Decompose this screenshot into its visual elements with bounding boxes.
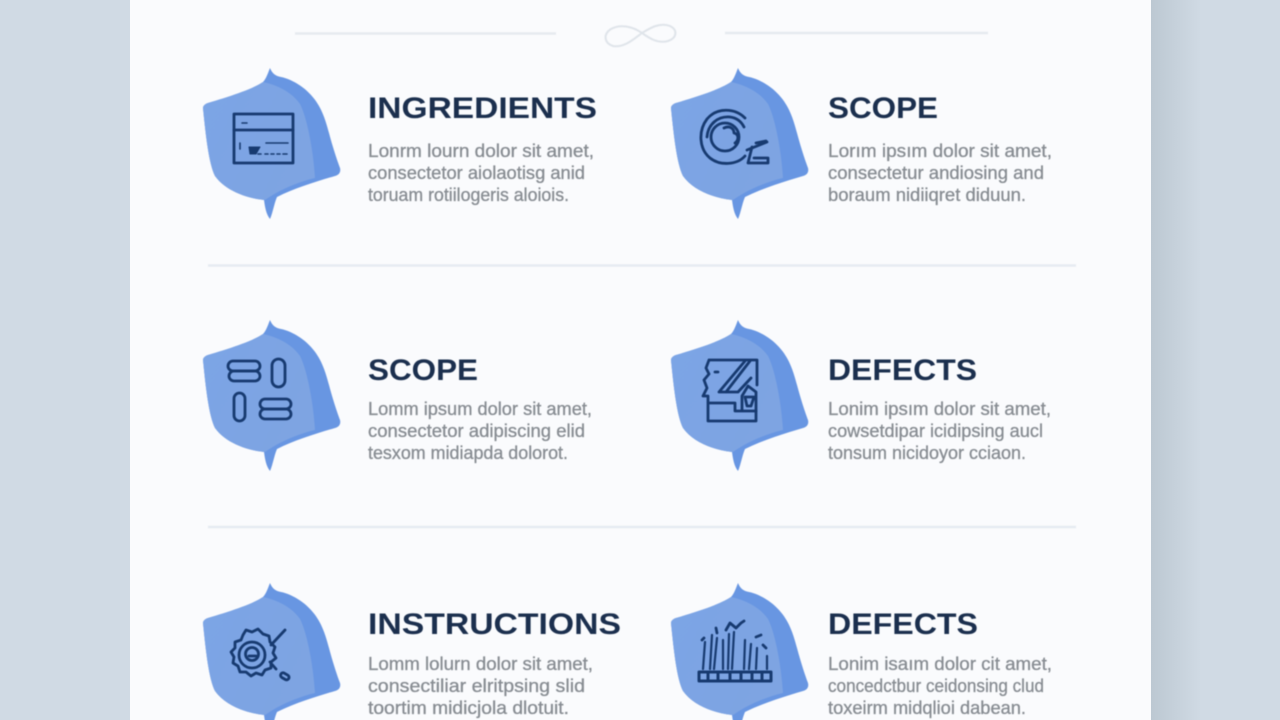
- panel: scope top: [671, 68, 1052, 219]
- icon: damaged document: [703, 360, 757, 421]
- body text: scope: [368, 399, 592, 463]
- card panel: [130, 0, 1151, 720]
- row divider 2: [208, 526, 1076, 528]
- body text: defects: [828, 399, 1051, 463]
- body text: ingredients: Lonrm lourn dolor sit amet,: [368, 141, 594, 161]
- heading: defects: DEFECTS: [828, 608, 978, 641]
- icon: broken bars: [699, 621, 771, 681]
- heading: scope: SCOPE: [828, 92, 938, 125]
- body text: instructions: consectiliar elritpsing slid: [368, 676, 585, 696]
- heading: ingredients: INGREDIENTS: [368, 92, 597, 125]
- icon: recipe window: [234, 114, 293, 163]
- heading: scope: SCOPE: [368, 354, 478, 387]
- body text: defects: toxeirm midqlioi dabean.: [828, 698, 1026, 718]
- panel: defects bottom: [671, 583, 1052, 720]
- body text: scope: Lorım ipsım dolor sit amet,: [828, 141, 1052, 161]
- panel: ingredients: [203, 68, 597, 219]
- body text: scope: consectetor adipiscing elid: [368, 421, 585, 441]
- card shadow: [1151, 0, 1201, 720]
- body text: defects: [828, 654, 1052, 718]
- icon tile: defects: [671, 583, 808, 720]
- body text: scope: boraum nidiiqret diduun.: [828, 185, 1026, 205]
- body text: instructions: [368, 654, 593, 718]
- body text: defects: cowsetdipar icidipsing aucl: [828, 421, 1043, 441]
- body text: defects: Lonim ipsım dolor sit amet,: [828, 399, 1051, 419]
- panel: scope middle: [203, 320, 592, 471]
- body text: defects: concedctbur ceidonsing clud: [828, 676, 1044, 696]
- icon tile: instructions: [203, 583, 340, 720]
- body text: ingredients: consectetor aiolaotisg anid: [368, 163, 585, 183]
- body text: ingredients: [368, 141, 594, 205]
- body text: scope: consectetur andiosing and: [828, 163, 1044, 183]
- body text: ingredients: toruam rotiilogeris aloiois.: [368, 185, 569, 205]
- body text: instructions: toortim midicjola dlotuit.: [368, 698, 569, 718]
- panel: instructions: [203, 583, 621, 720]
- row divider 1: [208, 264, 1076, 267]
- body text: defects: tonsum nicidoyor cciaon.: [828, 443, 1026, 463]
- body text: defects: Lonim isaım dolor cit amet,: [828, 654, 1052, 674]
- heading: instructions: INSTRUCTIONS: [368, 608, 621, 641]
- body text: scope: [828, 141, 1052, 205]
- icon tile: defects: [671, 320, 808, 471]
- icon tile: ingredients: [203, 68, 340, 219]
- panel: defects middle: [671, 320, 1051, 471]
- body text: instructions: Lomm lolurn dolor sit amet,: [368, 654, 593, 674]
- icon tile: scope: [203, 320, 340, 471]
- body text: scope: tesxom midiapda dolorot.: [368, 443, 568, 463]
- icon: gear and pin: [231, 629, 290, 681]
- body text: scope: Lomm ipsum dolor sit amet,: [368, 399, 592, 419]
- icon tile: scope: [671, 68, 808, 219]
- icon: target with pointer: [701, 110, 768, 163]
- icon: pills: [228, 359, 291, 421]
- heading: defects: DEFECTS: [828, 354, 977, 387]
- top ornament: infinity divider: [295, 25, 988, 46]
